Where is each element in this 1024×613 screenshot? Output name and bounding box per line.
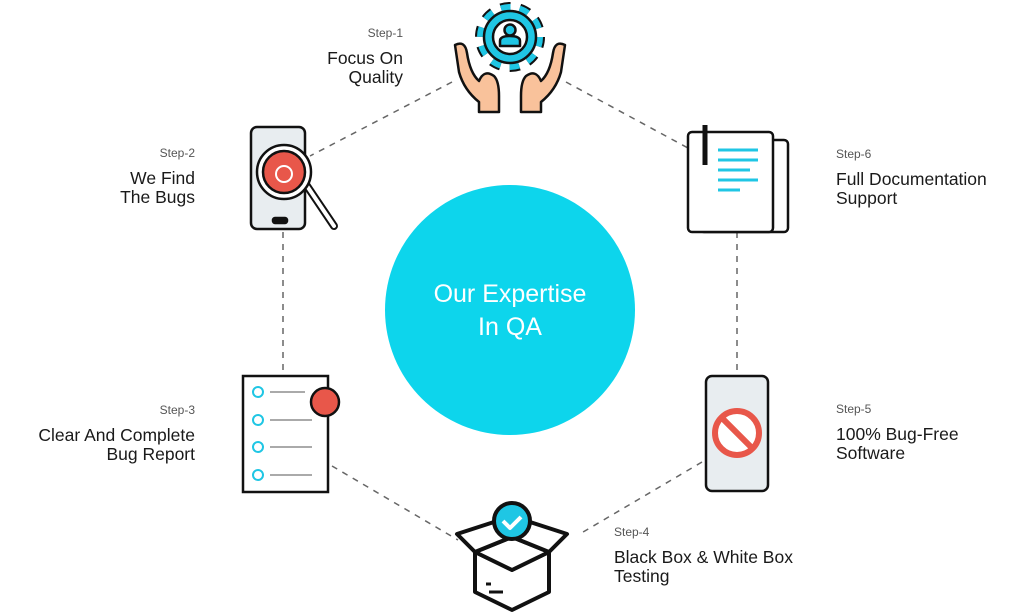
step 3 text: Step-3 (160, 403, 195, 417)
step 3 text: Clear And Complete (38, 425, 195, 445)
step 4 text: Black Box & White Box (614, 547, 793, 567)
step 3 text: Bug Report (106, 444, 195, 464)
step 3 text (38, 403, 195, 464)
step 1 text: Step-1 (368, 26, 403, 40)
icon: open box with check (457, 503, 567, 610)
icon: phone with no-bug (706, 376, 768, 491)
step 5 text: 100% Bug-Free (836, 424, 959, 444)
step 1 text: Quality (349, 67, 403, 87)
step 5 text: Software (836, 443, 905, 463)
step 2 text: The Bugs (120, 187, 195, 207)
step 4 text (614, 525, 793, 586)
icon: report with bug (243, 376, 339, 492)
step 1 text: Focus On (327, 48, 403, 68)
step 5 text (836, 402, 959, 463)
step 6 text (836, 147, 987, 208)
step 6 text: Support (836, 188, 897, 208)
icon: phone with magnifier (251, 127, 334, 229)
icon: gear with hands (455, 9, 565, 112)
step 4 text: Step-4 (614, 525, 649, 539)
step 6 text: Step-6 (836, 147, 871, 161)
center circle (385, 185, 635, 435)
step 2 text (120, 146, 195, 207)
step 6 text: Full Documentation (836, 169, 987, 189)
center circle: In QA (478, 313, 542, 341)
step 2 text: We Find (130, 168, 195, 188)
step 1 text (327, 26, 403, 87)
icon: documents (688, 125, 788, 232)
step 4 text: Testing (614, 566, 669, 586)
step 5 text: Step-5 (836, 402, 871, 416)
step 2 text: Step-2 (160, 146, 195, 160)
center circle: Our Expertise (434, 280, 586, 308)
